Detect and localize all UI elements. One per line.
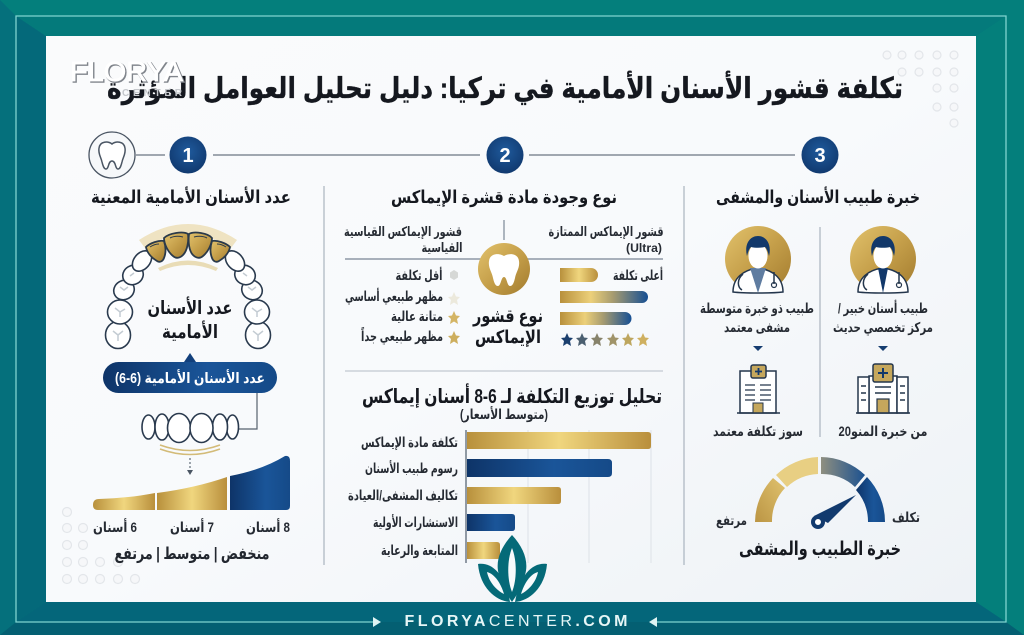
- gauge: [755, 457, 885, 527]
- cost scale label: منخفض | متوسط | مرتفع: [114, 545, 270, 564]
- arrow: expert: [878, 346, 888, 351]
- heading: column 1: عدد الأسنان الأمامية المعنية: [91, 186, 291, 207]
- bar chart: cost breakdown: رسوم طبيب الأسنان: [365, 460, 458, 477]
- arch center label: [148, 296, 232, 342]
- expert doctor text: طبيب أسنان خبير /: [838, 300, 928, 316]
- standard features: أقل تكلفة: [396, 267, 442, 283]
- tier labels: 7 أسنان: [170, 518, 214, 535]
- column split line: [819, 227, 821, 437]
- step 1 badge: 1: [182, 145, 194, 167]
- heading: cost chart: (متوسط الأسعار): [460, 406, 548, 422]
- icon: large hospital: [856, 364, 910, 413]
- step 2 badge: 2: [499, 145, 511, 167]
- section rule: [345, 370, 663, 372]
- icon: dental arch: [106, 224, 270, 348]
- icon: expert doctor: [850, 226, 916, 293]
- bar chart: cost breakdown: الاستشارات الأولية: [373, 514, 458, 530]
- expert doctor text: [833, 300, 933, 335]
- standard header: القياسية: [422, 240, 462, 255]
- icon: veneer teeth: [142, 414, 238, 454]
- step 2 badge: [486, 136, 524, 174]
- step 3 badge: 3: [814, 145, 826, 167]
- expert doctor text: مركز تخصصي حديث: [833, 320, 933, 335]
- premium header: [548, 224, 664, 255]
- tier labels: 6 أسنان: [93, 518, 137, 535]
- step 3 badge: [802, 136, 838, 174]
- panel: number of front teeth: [91, 186, 291, 564]
- gauge right label: تكلف: [892, 510, 920, 525]
- step connector lines: [136, 154, 795, 156]
- premium features: أعلى تكلفة: [613, 267, 663, 283]
- bar chart: cost breakdown: تكاليف المشفى/العيادة: [348, 488, 458, 503]
- standard header: [344, 224, 462, 255]
- icon: standard hospital: [737, 365, 780, 413]
- standard caption: سوز تكلفة معتمد: [713, 424, 803, 439]
- footer brand: FLORYACENTER.COM: [404, 613, 628, 630]
- bar chart: cost breakdown: المتابعة والرعاية: [381, 543, 458, 558]
- heading: column 2: نوع وجودة مادة قشرة الإيماكس: [391, 187, 617, 208]
- arch center label: الأمامية: [162, 320, 218, 342]
- panel: dentist and hospital: [700, 186, 933, 560]
- tier labels: [93, 518, 290, 535]
- logo leaves: [478, 535, 547, 602]
- standard features: مظهر طبيعي أساسي: [345, 288, 443, 304]
- bar: 8 teeth: [230, 456, 290, 510]
- connector to teeth: [239, 393, 257, 429]
- tier labels: 8 أسنان: [246, 518, 290, 535]
- premium features: [560, 267, 663, 346]
- dashed arrow: [187, 458, 193, 475]
- watermark logo: CENTER: [122, 88, 183, 99]
- column dividers: [324, 186, 684, 565]
- callout pill: عدد الأسنان الأمامية (6-6): [115, 369, 265, 387]
- mid-level doctor text: مشفى معتمد: [724, 320, 790, 335]
- mid-level doctor text: طبيب ذو خبرة متوسطة: [700, 301, 814, 316]
- expert caption: من خبرة المنو20: [838, 424, 928, 439]
- step 1 badge: [170, 136, 206, 174]
- decorative dots bottom left: [62, 508, 140, 584]
- watermark logo: FLORYA: [71, 57, 184, 88]
- heading: column 3: خبرة طبيب الأسنان والمشفى: [716, 186, 920, 208]
- panel: emax material: [344, 187, 664, 563]
- premium header: (Ultra): [626, 243, 662, 255]
- decorative dots top right: [883, 51, 958, 127]
- standard header: قشور الإيماكس القياسية: [344, 224, 462, 239]
- bar: 7 teeth: [157, 477, 227, 510]
- material label: نوع قشور: [472, 306, 543, 327]
- bar: 6 teeth: [93, 493, 155, 510]
- icon: tooth badge: [89, 132, 135, 178]
- gauge left label: مرتفع: [716, 513, 747, 528]
- gauge caption: خبرة الطبيب والمشفى: [739, 539, 901, 560]
- mid-level doctor text: [700, 301, 814, 335]
- title: تكلفة قشور الأسنان الأمامية في تركيا: دليل تحليل العوامل المؤثرة: [107, 70, 903, 105]
- comparison rules: [345, 220, 663, 259]
- icon: mid-level doctor: [725, 226, 791, 293]
- heading: cost chart: تحليل توزيع التكلفة لـ 6-8 أسنان إيماكس: [362, 382, 662, 408]
- bar chart: cost breakdown: تكلفة مادة الإيماكس: [361, 435, 458, 450]
- standard features: متانة عالية: [391, 309, 443, 324]
- watermark logo: FLORYA: [70, 56, 183, 87]
- standard features: مظهر طبيعي جداً: [361, 326, 443, 344]
- material label: الإيماكس: [475, 327, 541, 347]
- material label: [472, 306, 543, 347]
- premium header: قشور الإيماكس الممتازة: [548, 224, 664, 239]
- callout pill: [103, 353, 277, 393]
- heading: cost chart: [362, 382, 662, 422]
- standard features: [345, 267, 460, 344]
- arrow: mid-level: [753, 346, 763, 351]
- watermark logo: [70, 56, 184, 99]
- icon: gold tooth: [478, 243, 530, 295]
- arch center label: عدد الأسنان: [148, 296, 232, 318]
- bar chart: cost breakdown: [348, 430, 651, 563]
